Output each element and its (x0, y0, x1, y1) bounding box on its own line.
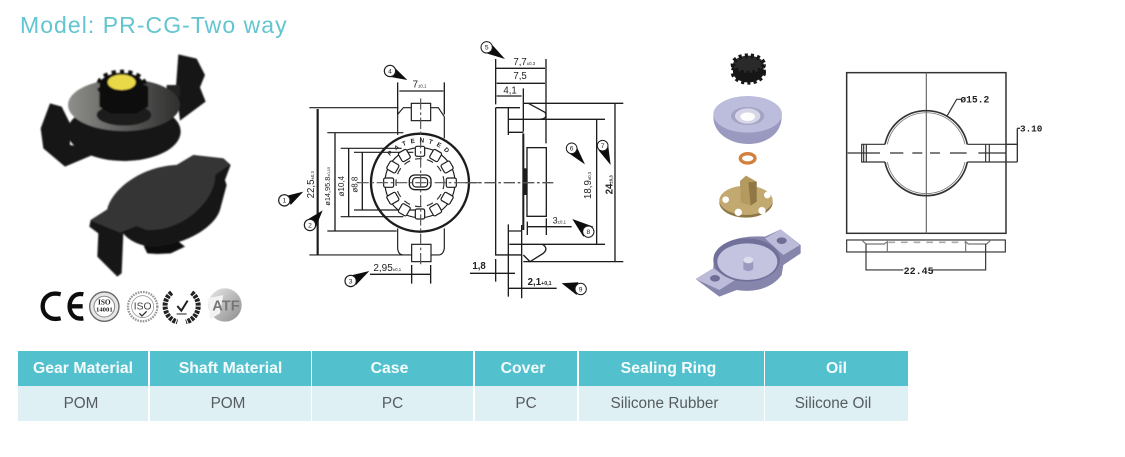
PATENTED lettering: PATENTED (387, 138, 449, 156)
dimension labels: 7,5 (513, 71, 527, 82)
callout 2: 2 (308, 222, 312, 229)
value: shaft material (150, 386, 311, 421)
part: shaft with base (719, 176, 773, 218)
value: cover (475, 386, 577, 421)
dimension labels: 7±0,1 (413, 80, 427, 91)
logo: CE mark (43, 294, 83, 319)
dimension labels: ø8,8 (351, 176, 360, 193)
header: sealing ring (579, 351, 764, 386)
technical drawing: side view (465, 42, 623, 298)
value: oil: Silicone Oil (795, 395, 871, 412)
dimension labels: 2,95±0,1 (373, 263, 402, 274)
value: case (312, 386, 473, 421)
part: case base (696, 229, 801, 297)
leader and label: tab width (1006, 124, 1043, 162)
logo: ISO check (128, 292, 157, 321)
leader and label: tab width: 3.10 (1020, 124, 1043, 135)
callout 6 (566, 143, 585, 164)
header: oil: Oil (826, 360, 847, 377)
outline and dimension lines (465, 59, 623, 298)
header: shaft material: Shaft Material (179, 360, 282, 377)
technical drawing: front view (278, 64, 480, 288)
value: sealing ring: Silicone Rubber (610, 395, 718, 412)
callout 4 (384, 65, 407, 80)
artwork canvas (40, 41, 1043, 324)
callout 2 (304, 210, 323, 231)
value: cover: PC (515, 395, 537, 412)
logo: ISO 14001 (90, 292, 119, 321)
dimension labels: 24±0,3 (604, 175, 615, 194)
certification logos (43, 288, 242, 322)
dimension labels: 4,1 (503, 85, 517, 96)
logo: laurel wreath check (165, 293, 198, 322)
dimension labels (306, 80, 427, 274)
callout 8 (572, 219, 594, 237)
callout 6: 6 (570, 146, 574, 153)
callout 3: 3 (349, 278, 353, 285)
value: gear material: POM (64, 395, 98, 412)
tab squares (411, 103, 431, 262)
header: shaft material (150, 351, 311, 386)
leader and label: diameter: ø15.2 (960, 95, 989, 106)
dimension labels: 1,8 (472, 261, 486, 272)
value: gear material (18, 386, 148, 421)
callout 4: 4 (388, 68, 392, 75)
header: gear material: Gear Material (33, 360, 133, 377)
callout 1: 1 (282, 198, 286, 205)
callout 8: 8 (586, 229, 590, 236)
dimension lines (309, 82, 444, 284)
dimension labels: ø10,4 (337, 175, 346, 196)
value: case: PC (382, 395, 403, 412)
callout 7: 7 (601, 143, 605, 150)
leader and label: diameter (947, 95, 989, 117)
photo: upper actuator with gear (41, 54, 206, 167)
plan view outline (847, 73, 1006, 233)
circular opening with tabs (862, 111, 1006, 196)
dimension labels: 7,7±0,3 (513, 57, 536, 68)
part: cover disc (713, 96, 782, 144)
dimension labels: ø14,95.8±0,15 (323, 166, 332, 206)
header: cover (475, 351, 577, 386)
callout 7 (597, 140, 611, 165)
header: case: Case (371, 360, 408, 377)
title: Model: PR-CG-Two way (20, 12, 288, 38)
dimension labels (472, 57, 615, 288)
logo: ATF globe: ATF (212, 299, 240, 315)
header: cover: Cover (501, 360, 545, 377)
dimension labels: 18,9±0,3 (583, 171, 594, 199)
logo: ISO 14001: ISO (98, 297, 111, 306)
dimension labels: 3±0,1 (553, 215, 567, 225)
materials table (18, 351, 908, 421)
logo: ISO check: ISO (134, 301, 152, 312)
callout 5: 5 (485, 45, 489, 52)
logo: ATF globe (208, 288, 242, 322)
dimension labels: 22,5±0,3 (306, 171, 317, 198)
callout 5 (481, 42, 505, 59)
dimension labels: 2,1+0,1 (528, 277, 552, 288)
value: oil (765, 386, 908, 421)
value: shaft material: POM (211, 395, 245, 412)
header: case (312, 351, 473, 386)
value: sealing ring (579, 386, 764, 421)
callout 9 (562, 282, 586, 295)
callout 9: 9 (579, 286, 583, 293)
round gear outline (357, 98, 480, 265)
header: sealing ring: Sealing Ring (621, 360, 716, 377)
logo: ISO 14001: 14001 (96, 307, 113, 314)
photo: lower actuator underside (89, 155, 231, 277)
part: black gear (733, 56, 764, 82)
part: sealing ring (740, 154, 755, 163)
exploded view of parts (696, 56, 801, 297)
product photo: assembled actuator, top and underside (41, 54, 231, 277)
header: gear material (18, 351, 148, 386)
callout 3 (345, 271, 369, 287)
callout 1 (279, 192, 303, 206)
technical drawing: outline dimensions (847, 73, 1043, 277)
header: oil (765, 351, 908, 386)
side view with width dimension: 22.45 (904, 266, 934, 277)
side view with width dimension (847, 240, 1005, 277)
